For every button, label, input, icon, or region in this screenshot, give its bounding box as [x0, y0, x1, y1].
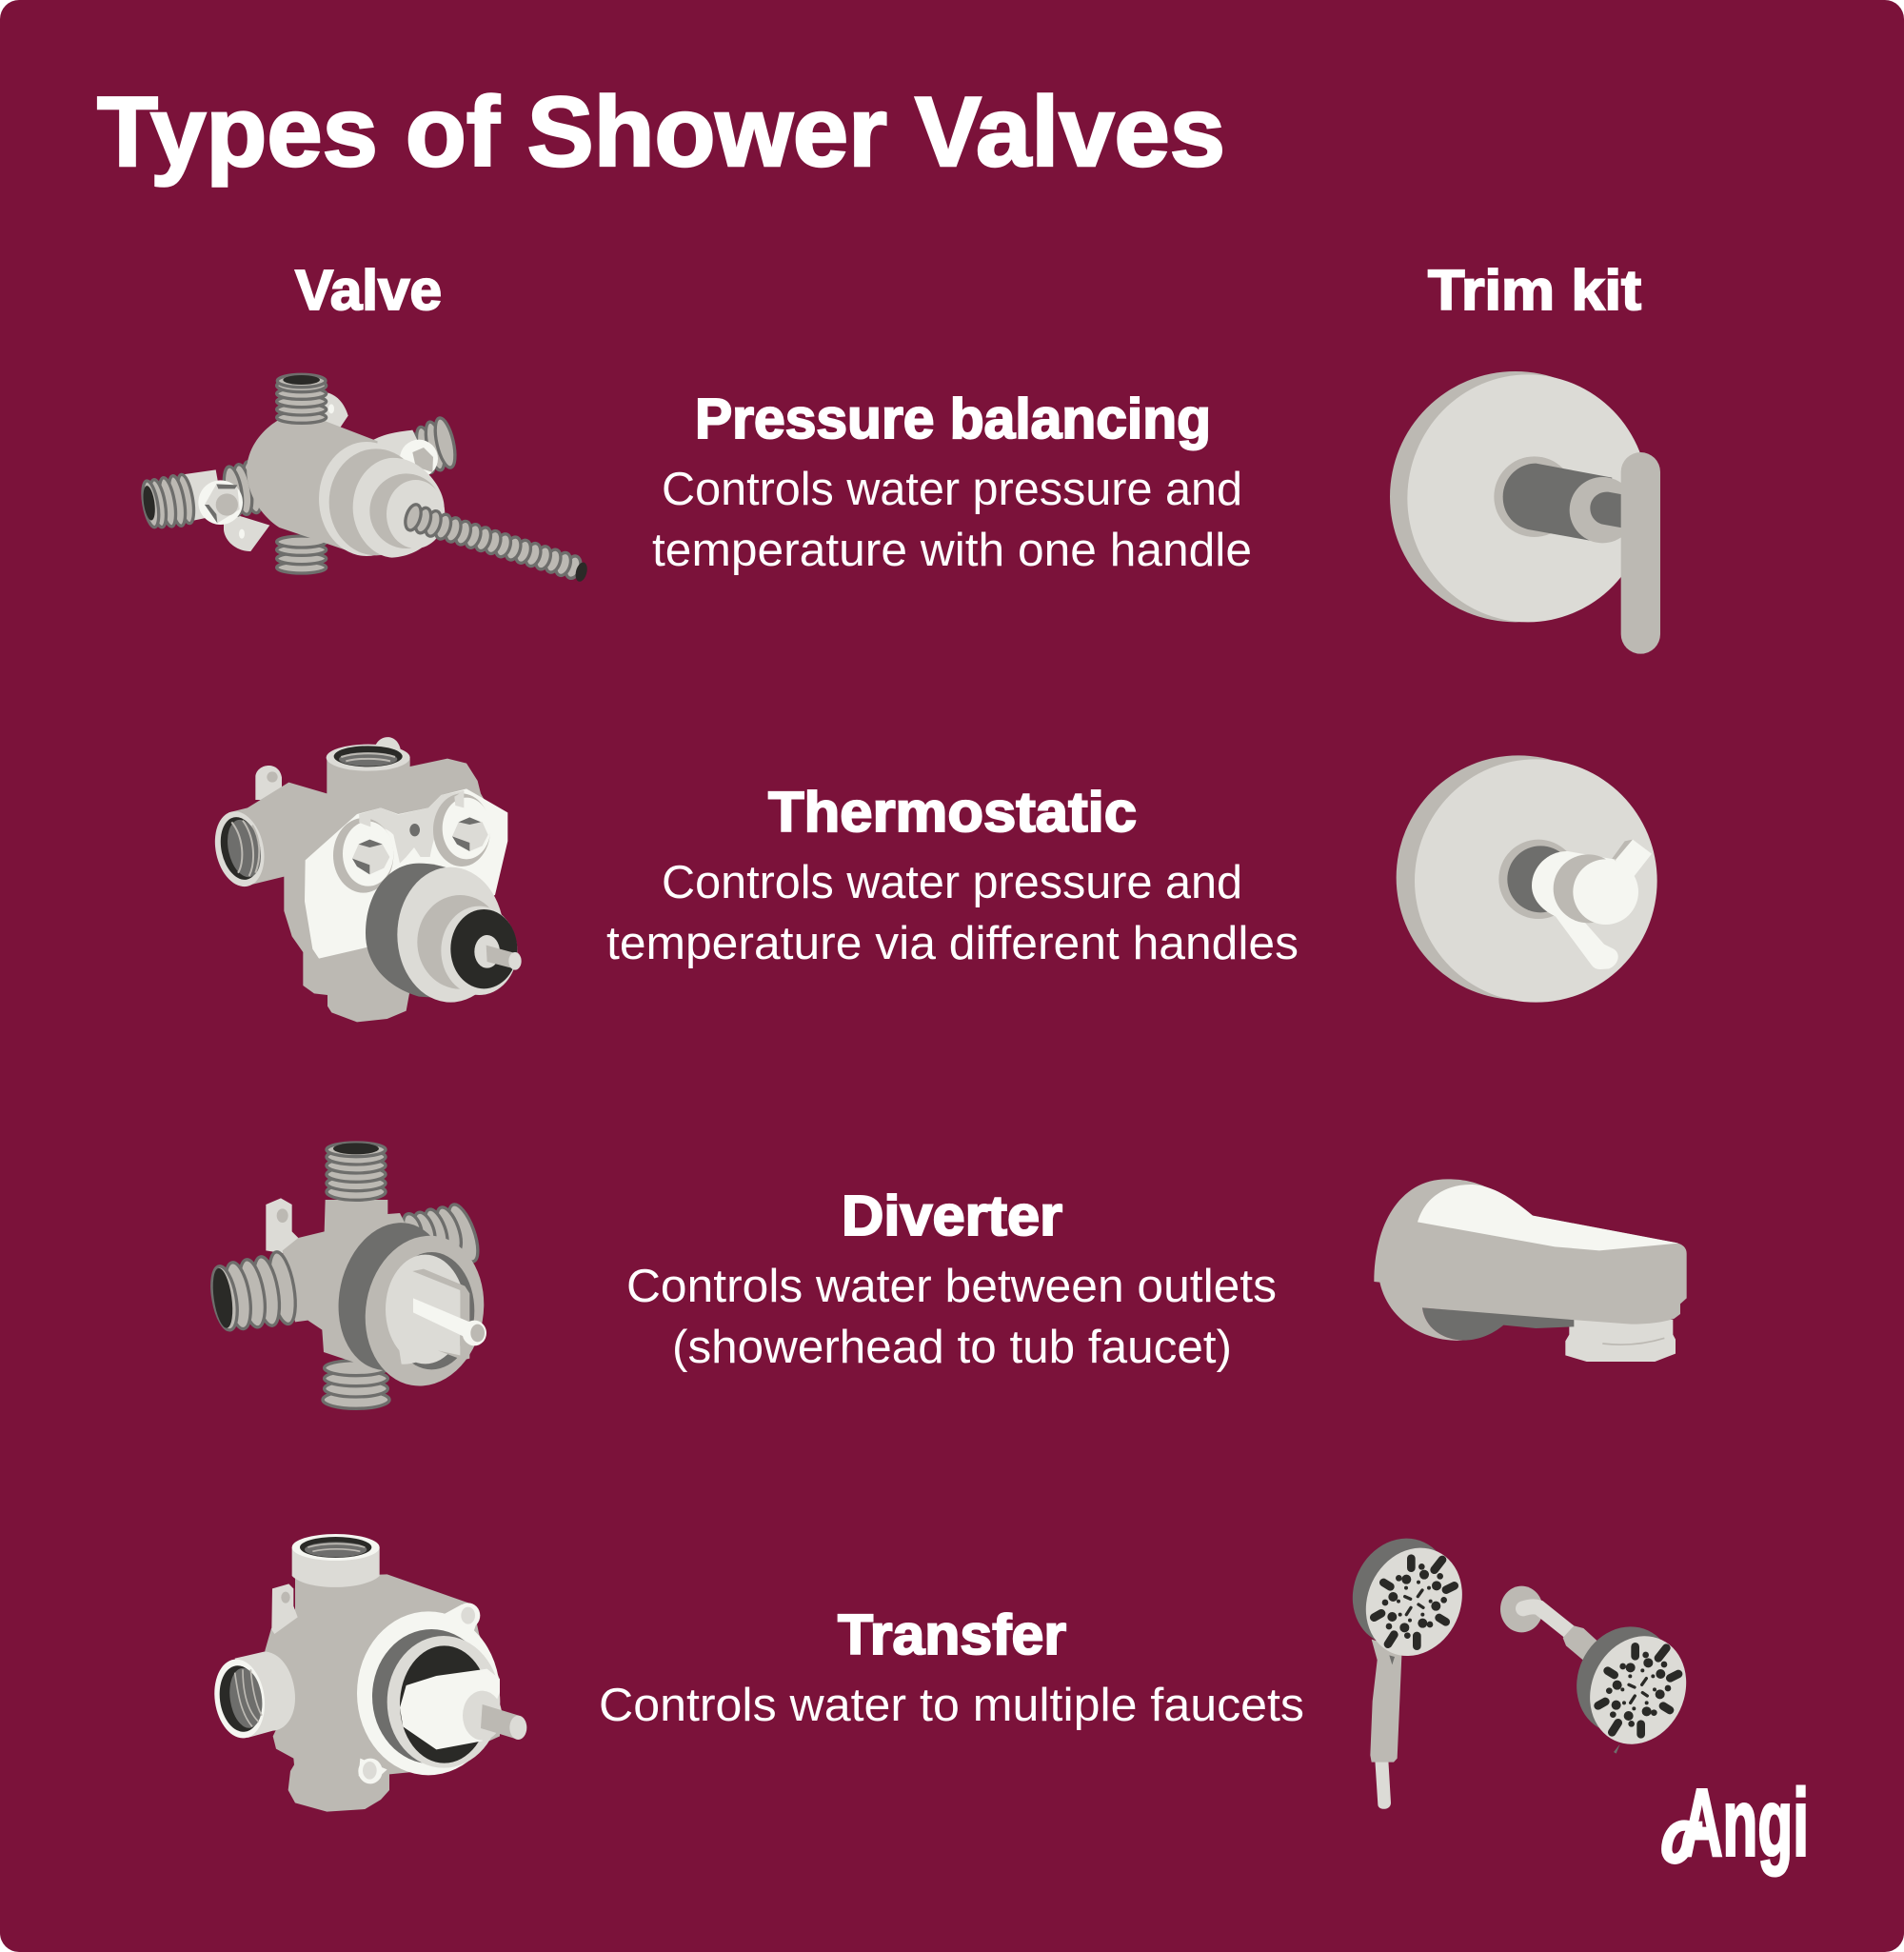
title: Types of Shower Valves	[97, 77, 1225, 188]
icon: handheld and wall shower heads	[1336, 1523, 1809, 1877]
icon: transfer valve	[209, 1534, 526, 1812]
heading: pressure balancing: Pressure balancing	[695, 388, 1211, 450]
description: thermostatic: Controls water pressure and	[662, 857, 1242, 908]
panel: pressure balancing	[140, 371, 1660, 654]
panel: diverter	[208, 1143, 1687, 1408]
panel: thermostatic	[208, 737, 1657, 1022]
wall shower	[1500, 1586, 1703, 1760]
description line 2: pressure balancing: temperature with one handle	[652, 525, 1252, 576]
column heading: trim kit: Trim kit	[1428, 259, 1641, 322]
description: diverter: Controls water between outlets	[626, 1261, 1277, 1312]
logo: Angi	[1667, 1770, 1809, 1877]
icon: tub spout	[1374, 1179, 1687, 1362]
heading: diverter: Diverter	[842, 1185, 1062, 1247]
heading: thermostatic: Thermostatic	[768, 781, 1137, 844]
icon: diverter valve	[208, 1143, 496, 1408]
icon: pressure balancing valve	[140, 374, 589, 583]
description line 2: thermostatic: temperature via different handles	[606, 918, 1299, 969]
icon: round handle trim plate	[1397, 755, 1657, 1003]
description: transfer: Controls water to multiple faucets	[599, 1680, 1304, 1731]
heading: transfer: Transfer	[838, 1603, 1066, 1666]
logo: Angi: Angi	[1681, 1770, 1809, 1877]
column heading: valve: Valve	[295, 259, 442, 322]
description: pressure balancing: Controls water pressure and	[662, 464, 1242, 515]
panel: transfer	[209, 1523, 1809, 1877]
handheld shower	[1336, 1523, 1479, 1809]
icon: lever trim plate	[1390, 371, 1660, 654]
icon: thermostatic valve	[208, 737, 522, 1022]
description line 2: diverter: (showerhead to tub faucet)	[672, 1322, 1232, 1373]
